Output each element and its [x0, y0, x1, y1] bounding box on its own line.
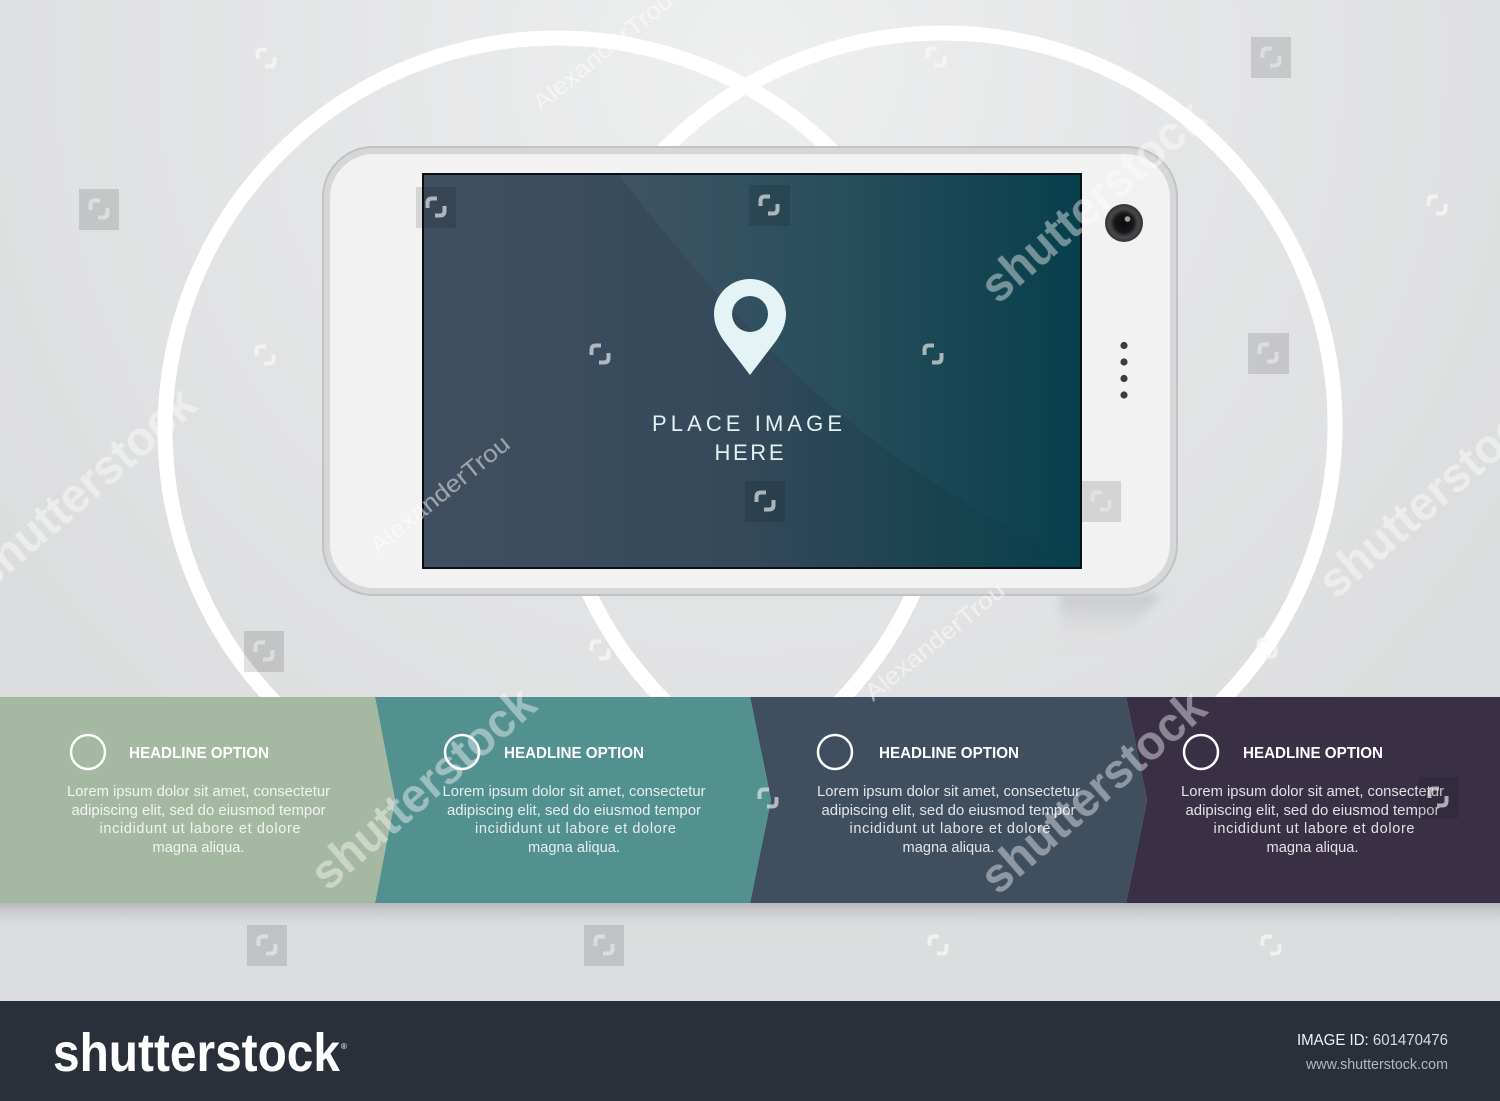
footer background [0, 1001, 1500, 1101]
right ring [551, 33, 1335, 817]
image id: IMAGE ID: 601470476 [1297, 1032, 1448, 1049]
headline 1: HEADLINE OPTION [129, 745, 269, 762]
body text 4 [1181, 784, 1444, 856]
body text 3: magna aliqua. [902, 840, 994, 856]
body text 3 [817, 784, 1080, 856]
segment 4 background [1126, 697, 1500, 903]
body text 1 [67, 784, 330, 856]
panel 4 content [1181, 735, 1444, 856]
shutterstock watermark text: shutterstock [970, 680, 1217, 904]
panel 1 content [67, 735, 330, 856]
headline 4: HEADLINE OPTION [1243, 745, 1383, 762]
footer bar [0, 1001, 1500, 1101]
location pin icon [714, 279, 786, 375]
panel 2 content [442, 735, 706, 856]
body text 1: Lorem ipsum dolor sit amet, consectetur [67, 784, 330, 800]
screen gloss [620, 175, 1080, 566]
body text 1: adipiscing elit, sed do eiusmod tempor [72, 803, 326, 819]
phone [323, 147, 1177, 595]
contributor watermark text: AlexanderTrou [860, 577, 1010, 707]
body text 2 [442, 784, 706, 856]
screen base [423, 174, 1081, 568]
shutterstock logo: shutterstock [53, 1023, 341, 1083]
headline 3: HEADLINE OPTION [879, 745, 1019, 762]
body text 3: adipiscing elit, sed do eiusmod tempor [822, 803, 1076, 819]
placeholder text [652, 411, 842, 465]
contributor watermark text [365, 0, 1010, 707]
icon circle 4 [1184, 735, 1218, 769]
body text 2: incididunt ut labore et dolore [475, 821, 676, 837]
body text 4: incididunt ut labore et dolore [1214, 821, 1414, 837]
segment 2 background [375, 697, 771, 903]
body text 3: Lorem ipsum dolor sit amet, consectetur [817, 784, 1080, 800]
body text 3: incididunt ut labore et dolore [850, 821, 1050, 837]
placeholder text: PLACE IMAGE [652, 411, 842, 436]
icon circle 3 [818, 735, 852, 769]
shutterstock watermark text: shutterstock [300, 676, 547, 900]
body text 2: Lorem ipsum dolor sit amet, consectetur [442, 784, 706, 800]
body text 4: adipiscing elit, sed do eiusmod tempor [1186, 803, 1440, 819]
camera [1105, 204, 1143, 242]
body text 2: adipiscing elit, sed do eiusmod tempor [447, 803, 701, 819]
body text 1: magna aliqua. [152, 840, 244, 856]
icon circle 1 [71, 735, 105, 769]
phone face [330, 154, 1170, 588]
speaker dots [1120, 342, 1128, 399]
icon circle 2 [445, 735, 479, 769]
chevron band [0, 697, 1500, 903]
placeholder text: HERE [714, 440, 784, 465]
left ring [165, 38, 949, 822]
watermark squares [79, 37, 1458, 966]
body text 1: incididunt ut labore et dolore [100, 821, 300, 837]
website: www.shutterstock.com [1305, 1057, 1448, 1073]
segment 3 background [750, 697, 1147, 903]
soft phone shadow [1060, 594, 1162, 646]
body text 2: magna aliqua. [528, 840, 620, 856]
band shadow [0, 903, 1500, 933]
body text 4: magna aliqua. [1266, 840, 1358, 856]
headline 2: HEADLINE OPTION [504, 745, 644, 762]
decorative overlapping rings [165, 33, 1335, 822]
panel 3 content [817, 735, 1080, 856]
phone casing [323, 147, 1177, 595]
body text 4: Lorem ipsum dolor sit amet, consectetur [1181, 784, 1444, 800]
contributor watermark text: AlexanderTrou [365, 430, 515, 560]
contributor watermark text: AlexanderTrou [528, 0, 678, 117]
segment 1 background [0, 697, 395, 903]
screen [423, 174, 1081, 568]
shutterstock watermark text: shutterstock [970, 89, 1217, 313]
registered mark: ® [341, 1042, 347, 1051]
